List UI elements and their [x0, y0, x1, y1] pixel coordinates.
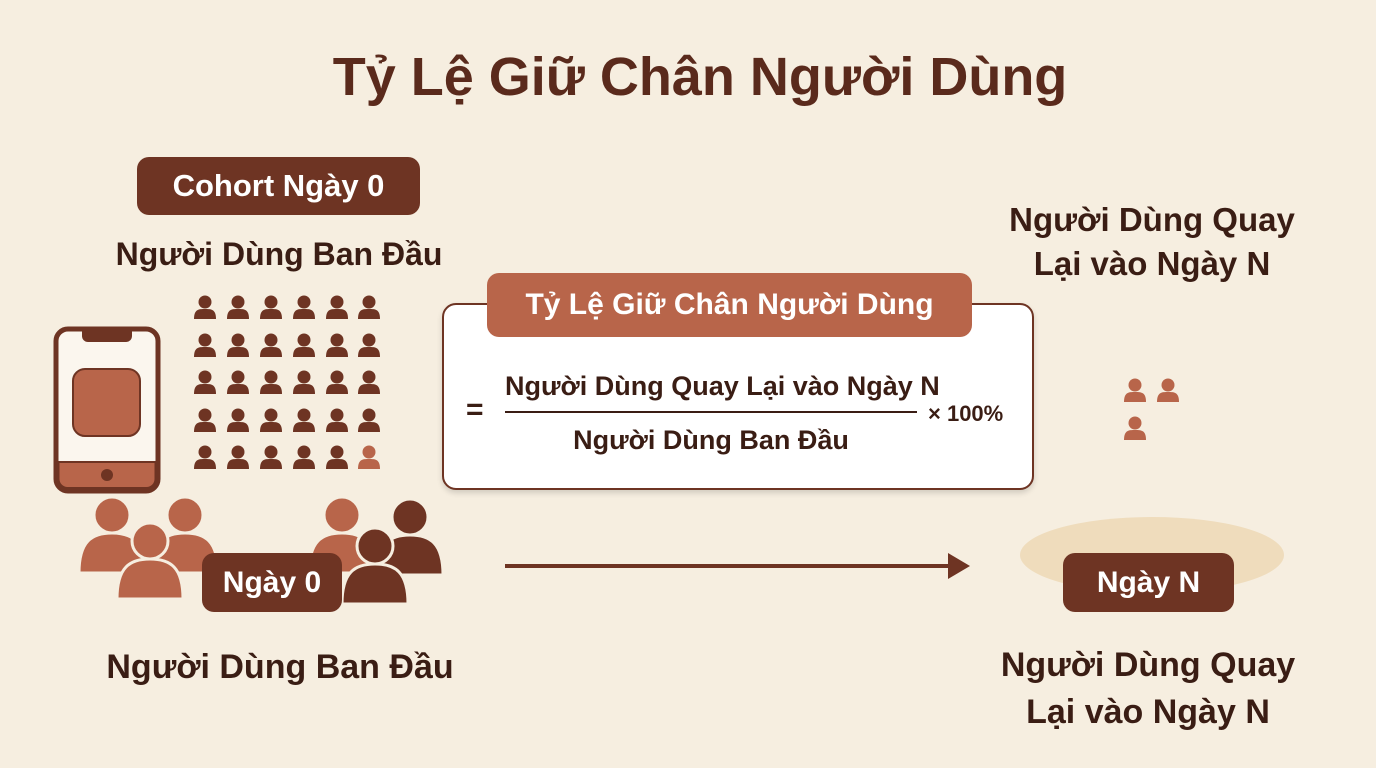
label: returning users bottom: Người Dùng Quay: [1001, 646, 1295, 684]
label: initial users top: Người Dùng Ban Đầu: [116, 236, 442, 272]
icon: group right: [309, 497, 443, 604]
label: returning users top: [1009, 201, 1295, 282]
label: returning users top: Người Dùng Quay: [1009, 201, 1295, 238]
badge: cohort day 0: [137, 157, 420, 215]
numerator: Người Dùng Quay Lại vào Ngày N: [505, 371, 940, 401]
equals sign: =: [466, 393, 484, 426]
denominator: Người Dùng Ban Đầu: [573, 425, 849, 455]
badge: day 0: Ngày 0: [223, 566, 321, 598]
label: returning users bottom: [1001, 646, 1295, 731]
icon: phone: [56, 329, 158, 491]
icon: group left: [79, 497, 218, 599]
label: returning users bottom: Lại vào Ngày N: [1026, 693, 1270, 731]
badge: day 0: [202, 553, 342, 612]
icon grid: initial users: [194, 296, 380, 469]
multiplier: × 100%: [928, 401, 1003, 426]
label: initial users bottom: Người Dùng Ban Đầu: [106, 648, 454, 686]
fraction line: [505, 411, 917, 413]
badge: cohort day 0: Cohort Ngày 0: [173, 168, 384, 203]
arrow: [505, 553, 970, 579]
formula header badge: Tỷ Lệ Giữ Chân Người Dùng: [525, 288, 934, 321]
formula header badge: [487, 273, 972, 337]
platform ellipse: [1020, 517, 1284, 593]
label: returning users top: Lại vào Ngày N: [1034, 245, 1270, 282]
title: Tỷ Lệ Giữ Chân Người Dùng: [333, 47, 1067, 107]
badge: day N: [1063, 553, 1234, 612]
icon: returning users: [1124, 378, 1179, 440]
badge: day N: Ngày N: [1097, 566, 1200, 598]
formula panel: [442, 303, 1034, 490]
